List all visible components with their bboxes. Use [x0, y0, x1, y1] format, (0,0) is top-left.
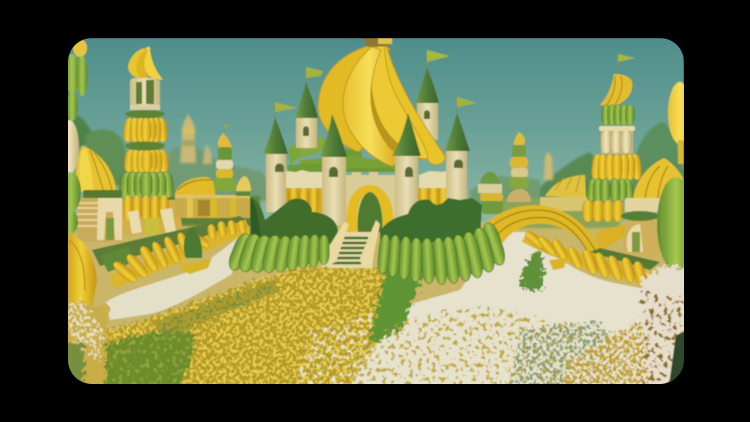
sky — [68, 38, 684, 238]
cream tier — [599, 126, 635, 154]
right banana wall — [418, 170, 460, 216]
gold glitter — [100, 268, 400, 392]
leaf boat right — [520, 250, 567, 292]
far right towers — [478, 132, 531, 214]
olive glitter — [100, 331, 195, 392]
top banana bunch — [128, 47, 163, 80]
dome tower — [478, 172, 503, 214]
green band — [125, 110, 165, 118]
green band two — [125, 142, 165, 150]
right tower — [582, 54, 642, 222]
green tier — [118, 171, 175, 199]
right tower — [444, 97, 477, 208]
distant hills and leaves — [72, 112, 684, 228]
green strip — [368, 268, 424, 345]
right banana row — [523, 229, 660, 288]
left tower — [118, 47, 183, 236]
big green banana — [657, 177, 695, 271]
left banana wall — [280, 170, 323, 214]
white road left — [106, 236, 240, 320]
leaves right — [380, 198, 482, 246]
leaves left — [250, 197, 338, 244]
olive strip — [150, 280, 280, 340]
gold field — [100, 268, 392, 392]
banana arch gate — [346, 185, 394, 232]
yellow banana — [668, 82, 692, 144]
back bunch of green bananas — [288, 137, 396, 175]
far banana bunch right — [540, 175, 588, 211]
infographic canvas — [68, 38, 684, 384]
back left tower — [295, 67, 323, 148]
yellow tier two — [124, 149, 169, 173]
left ground edge — [60, 300, 108, 392]
cream block — [130, 78, 160, 110]
gold sprinkle right — [340, 305, 660, 392]
right ground edge — [640, 266, 692, 392]
ground base — [68, 222, 684, 334]
top banana — [600, 74, 632, 106]
left tower — [263, 101, 297, 212]
banana bridge — [487, 205, 625, 260]
left edge banana stack — [68, 40, 98, 307]
rounded scene panel — [59, 38, 695, 392]
giant banana bunch — [318, 38, 445, 167]
yellow tier one — [123, 117, 168, 143]
olive patch — [100, 331, 195, 392]
left banana row along road — [92, 216, 252, 285]
tower base — [122, 195, 183, 236]
green tier lower — [586, 178, 634, 202]
flag — [618, 54, 635, 74]
left cream gatehouse — [77, 198, 122, 242]
grey green sprinkle — [510, 320, 625, 392]
cream glitter — [295, 305, 420, 392]
back right tower — [415, 50, 450, 140]
front left tower — [320, 114, 347, 225]
yellow tier — [591, 154, 642, 180]
stairway — [322, 220, 380, 268]
green tier — [602, 105, 634, 125]
far banana pavilion — [175, 177, 250, 218]
gold corner — [560, 320, 662, 392]
white ground right — [348, 231, 654, 384]
right banana bunch and gatehouse — [621, 158, 684, 258]
distant towers — [180, 114, 553, 180]
banana castle — [226, 38, 508, 285]
mid yellow tower left — [214, 124, 251, 191]
front right tower — [392, 113, 421, 220]
green banana ring right — [377, 221, 508, 285]
central gate wall — [344, 172, 395, 232]
right edge bananas — [656, 81, 684, 270]
leaf boat left — [178, 227, 212, 274]
green banana ring left — [226, 231, 329, 274]
speckled ground — [100, 268, 662, 392]
left banana bunch — [76, 146, 122, 198]
yellow tier lower — [582, 200, 624, 222]
tall mini tower — [507, 132, 531, 202]
